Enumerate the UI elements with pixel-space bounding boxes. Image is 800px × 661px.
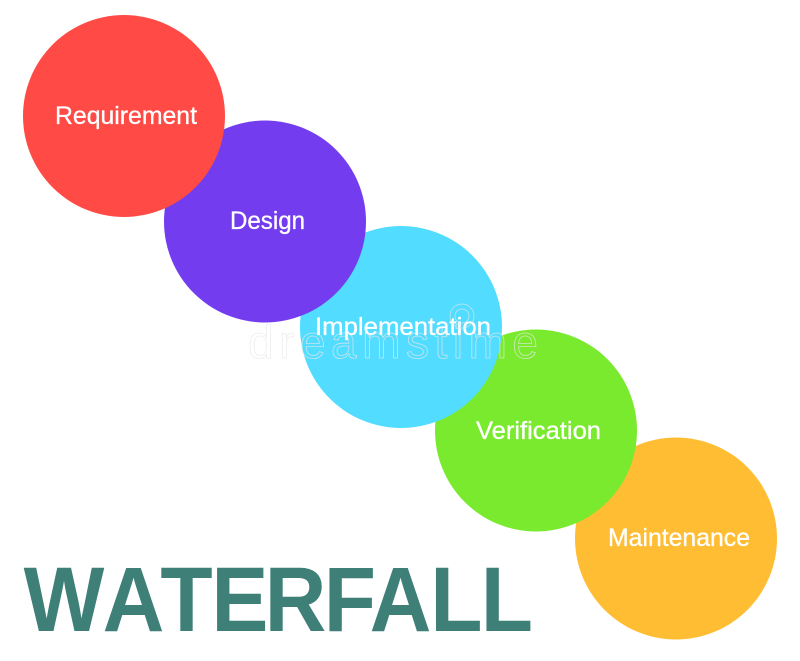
watermark: dreamstime	[248, 316, 538, 368]
stage: Maintenance	[575, 438, 777, 640]
title: WATERFALL	[24, 548, 533, 651]
stage: Design	[164, 120, 366, 322]
stage: Verification	[435, 330, 637, 532]
stage: Design: Design	[230, 207, 305, 235]
stage: Maintenance: Maintenance	[608, 524, 750, 552]
stage: Implementation	[300, 226, 502, 428]
stage: Implementation: Implementation	[315, 313, 491, 341]
stage: Requirement: Requirement	[55, 102, 197, 130]
stage: Verification: Verification	[476, 417, 601, 445]
stage: Requirement	[23, 15, 225, 217]
